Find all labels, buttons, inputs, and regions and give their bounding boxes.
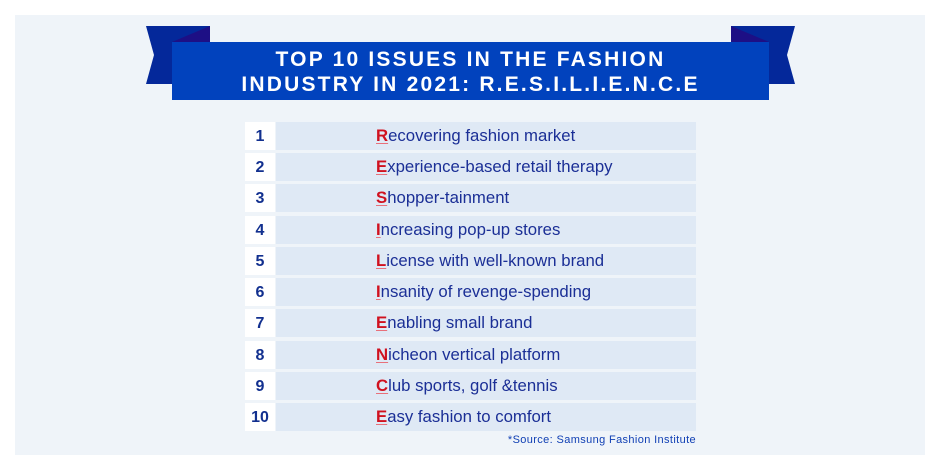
row 6: 6 <box>256 284 264 301</box>
row 3: Shopper-tainment <box>376 188 509 207</box>
source note: *Source: Samsung Fashion Institute <box>508 434 696 446</box>
left ribbon fold <box>172 26 210 42</box>
row 2: Experience-based retail therapy <box>376 157 613 176</box>
row 8 <box>245 341 696 369</box>
ribbon main band <box>172 42 769 100</box>
row 1: Recovering fashion market <box>376 126 575 145</box>
row 4: Increasing pop-up stores <box>376 220 560 239</box>
row 9: 9 <box>256 378 264 395</box>
right ribbon tail <box>731 26 795 84</box>
row 4 <box>245 216 696 244</box>
row 10: Easy fashion to comfort <box>376 407 551 426</box>
row 7 <box>245 309 696 337</box>
row 9 <box>245 372 696 400</box>
row 10 <box>245 403 696 431</box>
row 6 <box>245 278 696 306</box>
row 8: Nicheon vertical platform <box>376 345 560 364</box>
row 4: 4 <box>256 222 264 239</box>
row 8: 8 <box>256 347 264 364</box>
right ribbon fold <box>731 26 769 42</box>
row 5: License with well-known brand <box>376 251 604 270</box>
row 10: 10 <box>251 409 269 426</box>
banner ribbon <box>146 26 795 100</box>
row 1 <box>245 122 696 150</box>
row 7: Enabling small brand <box>376 313 532 332</box>
left ribbon tail <box>146 26 210 84</box>
row 9: Club sports, golf &tennis <box>376 376 558 395</box>
row 1: 1 <box>256 128 264 145</box>
row 6: Insanity of revenge-spending <box>376 282 591 301</box>
row 5 <box>245 247 696 275</box>
row 7: 7 <box>256 315 264 332</box>
title line 2: INDUSTRY IN 2021: R.E.S.I.L.I.E.N.C.E <box>241 73 700 96</box>
row 5: 5 <box>256 253 264 270</box>
row 2 <box>245 153 696 181</box>
row 3: 3 <box>256 190 264 207</box>
row 2: 2 <box>256 159 264 176</box>
title line 1: TOP 10 ISSUES IN THE FASHION <box>276 48 665 71</box>
row 3 <box>245 184 696 212</box>
